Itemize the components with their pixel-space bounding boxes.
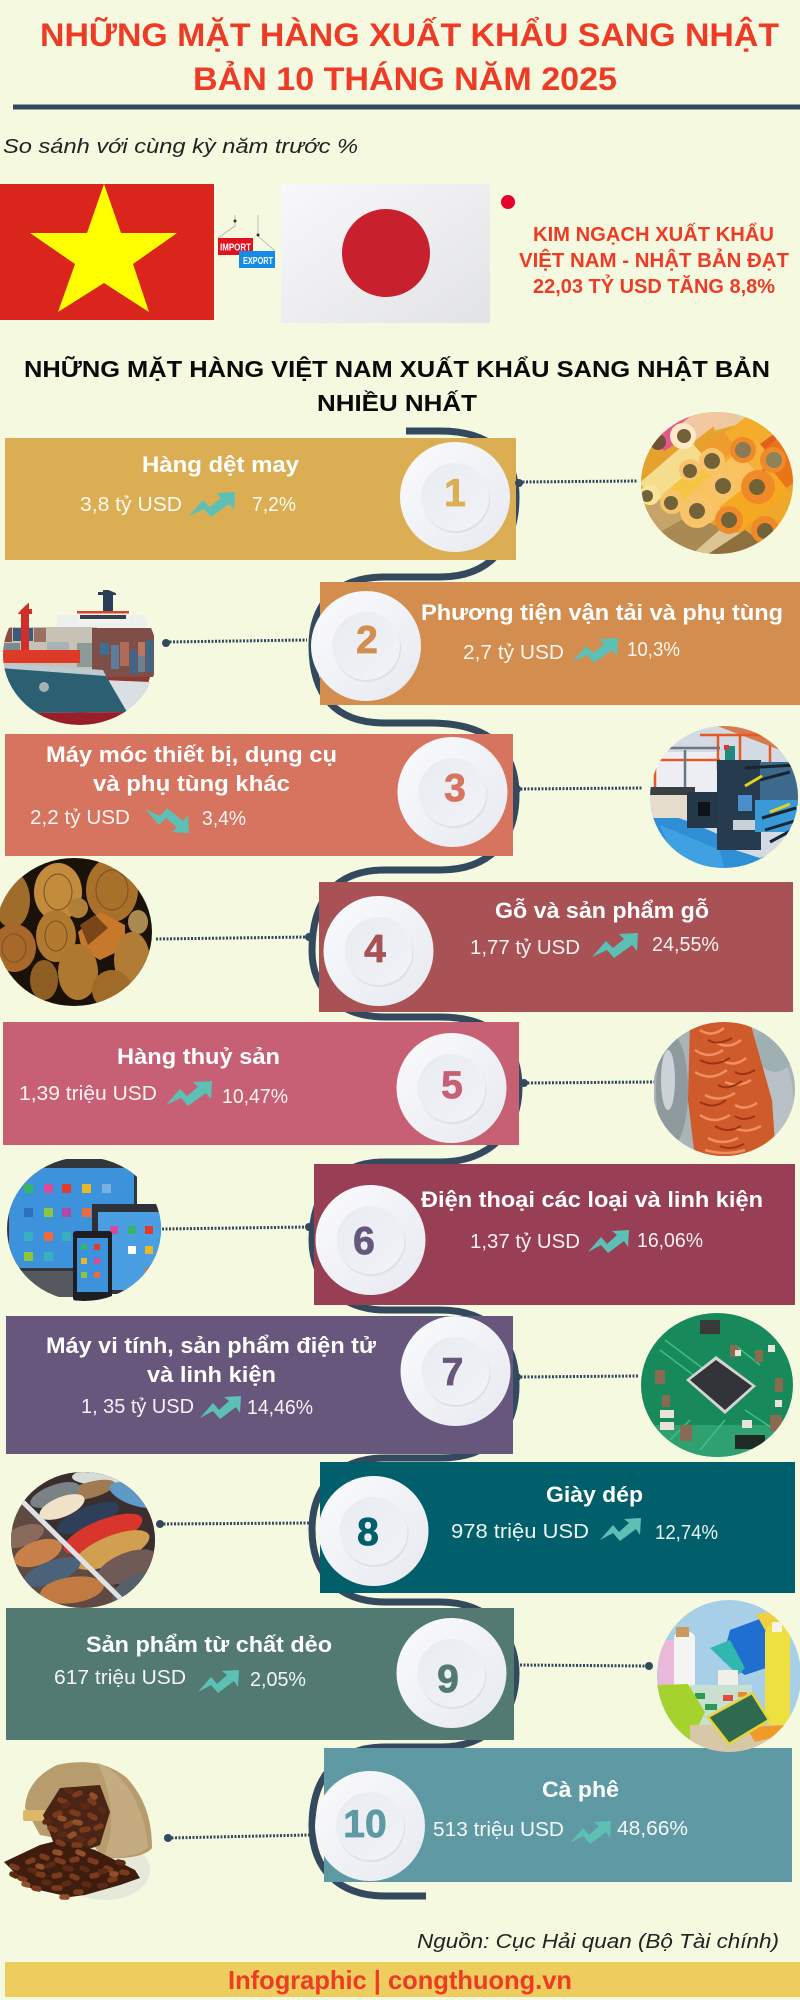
panel: item 9 plastics: Sản phẩm từ chất dẻo bbox=[86, 1632, 332, 1657]
panel: item 3 machinery: Máy móc thiết bị, dụng cụ bbox=[46, 742, 337, 767]
image: tablet and phone devices bbox=[7, 1159, 164, 1301]
panel: item 6 phones: 16,06% bbox=[637, 1230, 703, 1252]
panel: item 8 footwear bbox=[318, 1462, 795, 1593]
panel: item 4 wood: 24,55% bbox=[652, 934, 719, 956]
flag: Vietnam bbox=[0, 184, 214, 320]
panel: item 10 coffee: 513 triệu USD bbox=[433, 1819, 564, 1841]
panel: item 4 wood bbox=[319, 882, 793, 1012]
panel: item 1 textiles: 3,8 tỷ USD bbox=[80, 494, 182, 516]
panel: item 9 plastics: 9 bbox=[437, 1658, 459, 1701]
icon: import export signs: IMPORT bbox=[220, 242, 251, 254]
panel: item 1 textiles: Hàng dệt may bbox=[142, 452, 300, 477]
image: shoes on shelves bbox=[11, 1472, 155, 1608]
panel: item 9 plastics: 2,05% bbox=[250, 1669, 306, 1691]
heading: NHIỀU NHẤT bbox=[317, 389, 477, 416]
connector 2 bbox=[162, 639, 307, 647]
connector 1 bbox=[515, 479, 638, 487]
panel: item 7 computers: 14,46% bbox=[247, 1397, 313, 1419]
title bbox=[40, 17, 779, 97]
panel: item 8 footwear: Giày dép bbox=[546, 1482, 643, 1507]
connector 5 bbox=[520, 1079, 654, 1087]
flag: Japan bbox=[281, 184, 490, 323]
panel: item 4 wood: 1,77 tỷ USD bbox=[470, 937, 580, 959]
panel: item 6 phones: 6 bbox=[353, 1220, 375, 1263]
title: NHỮNG MẶT HÀNG XUẤT KHẨU SANG NHẬT bbox=[40, 17, 779, 53]
connector 8 bbox=[156, 1520, 309, 1528]
image: coffee sack bbox=[4, 1762, 152, 1900]
panel: item 3 machinery: 3,4% bbox=[202, 808, 246, 830]
panel: item 5 seafood: 1,39 triệu USD bbox=[19, 1083, 157, 1105]
image: container ship bbox=[0, 590, 154, 725]
panel: item 3 machinery bbox=[5, 734, 513, 856]
panel: item 6 phones: 1,37 tỷ USD bbox=[470, 1231, 580, 1253]
panel: item 4 wood: Gỗ và sản phẩm gỗ bbox=[495, 898, 709, 923]
connector 6 bbox=[162, 1223, 313, 1231]
source note: Nguồn: Cục Hải quan (Bộ Tài chính) bbox=[417, 1931, 779, 1953]
panel: item 10 coffee: 48,66% bbox=[617, 1818, 688, 1840]
panel: item 2 vehicles: Phương tiện vận tải và phụ tùng bbox=[421, 600, 783, 625]
panel: item 1 textiles: 7,2% bbox=[252, 494, 296, 516]
red dot bbox=[501, 195, 515, 209]
panel: item 3 machinery: 2,2 tỷ USD bbox=[30, 807, 130, 829]
callout: export value bbox=[519, 223, 789, 298]
panel: item 8 footwear: 8 bbox=[357, 1511, 379, 1554]
panel: item 6 phones: Điện thoại các loại và linh kiện bbox=[421, 1187, 763, 1212]
panel: item 7 computers bbox=[6, 1316, 513, 1454]
panel: item 6 phones bbox=[314, 1164, 795, 1305]
panel: item 10 coffee: 10 bbox=[343, 1803, 387, 1846]
panel: item 1 textiles bbox=[5, 438, 516, 560]
panel: item 7 computers: 7 bbox=[442, 1351, 463, 1394]
panel: item 1 textiles: 1 bbox=[444, 472, 466, 515]
panel: item 5 seafood: Hàng thuỷ sản bbox=[117, 1044, 280, 1069]
panel: item 7 computers: 1, 35 tỷ USD bbox=[81, 1396, 194, 1418]
callout: export value: 22,03 TỶ USD TĂNG 8,8% bbox=[533, 275, 775, 298]
image: log pile bbox=[0, 858, 154, 1010]
image: cleaning products bbox=[657, 1600, 800, 1755]
panel: item 10 coffee bbox=[315, 1748, 792, 1882]
panel: item 2 vehicles: 2,7 tỷ USD bbox=[463, 642, 564, 664]
panel: item 7 computers: Máy vi tính, sản phẩm điện tử bbox=[46, 1333, 376, 1358]
callout: export value: KIM NGẠCH XUẤT KHẨU bbox=[533, 223, 774, 246]
panel: item 2 vehicles: 10,3% bbox=[627, 639, 680, 661]
callout: export value: VIỆT NAM - NHẬT BẢN ĐẠT bbox=[519, 248, 789, 272]
footer bar: Infographic | congthuong.vn bbox=[228, 1965, 572, 1995]
panel: item 10 coffee: Cà phê bbox=[542, 1777, 619, 1802]
panel: item 8 footwear: 978 triệu USD bbox=[451, 1521, 589, 1543]
panel: item 9 plastics: 617 triệu USD bbox=[54, 1667, 186, 1689]
connector 4 bbox=[156, 933, 313, 941]
panel: item 4 wood: 4 bbox=[364, 928, 386, 971]
connector 10 bbox=[164, 1834, 309, 1842]
heading: NHỮNG MẶT HÀNG VIỆT NAM XUẤT KHẨU SANG NHẬT BẢN bbox=[24, 354, 770, 382]
panel: item 5 seafood bbox=[3, 1022, 519, 1145]
panel: item 5 seafood: 10,47% bbox=[222, 1086, 288, 1108]
image: fabric rolls bbox=[641, 412, 793, 554]
connector 7 bbox=[513, 1373, 638, 1381]
panel: item 2 vehicles: 2 bbox=[356, 619, 378, 662]
image: circuit board bbox=[640, 1312, 795, 1458]
title: BẢN 10 THÁNG NĂM 2025 bbox=[193, 61, 617, 97]
panel: item 8 footwear: 12,74% bbox=[655, 1522, 718, 1544]
panel: item 5 seafood: 5 bbox=[441, 1064, 463, 1107]
image: shrimp and fish bbox=[654, 1022, 796, 1158]
panel: item 3 machinery: 3 bbox=[444, 767, 466, 810]
connector 9 bbox=[520, 1662, 653, 1670]
panel: item 2 vehicles bbox=[311, 582, 800, 705]
icon: import export signs: EXPORT bbox=[243, 256, 273, 267]
subtitle: So sánh với cùng kỳ năm trước % bbox=[3, 136, 358, 158]
panel: item 9 plastics bbox=[6, 1608, 514, 1740]
heading bbox=[24, 354, 770, 416]
panel: item 3 machinery: và phụ tùng khác bbox=[93, 771, 290, 796]
serpentine path bbox=[312, 431, 519, 1896]
panel: item 7 computers: và linh kiện bbox=[147, 1362, 276, 1387]
footer bar bbox=[5, 1962, 800, 1997]
image: factory machine bbox=[650, 724, 800, 872]
connector 3 bbox=[513, 785, 642, 793]
icon: import export signs bbox=[218, 215, 275, 268]
